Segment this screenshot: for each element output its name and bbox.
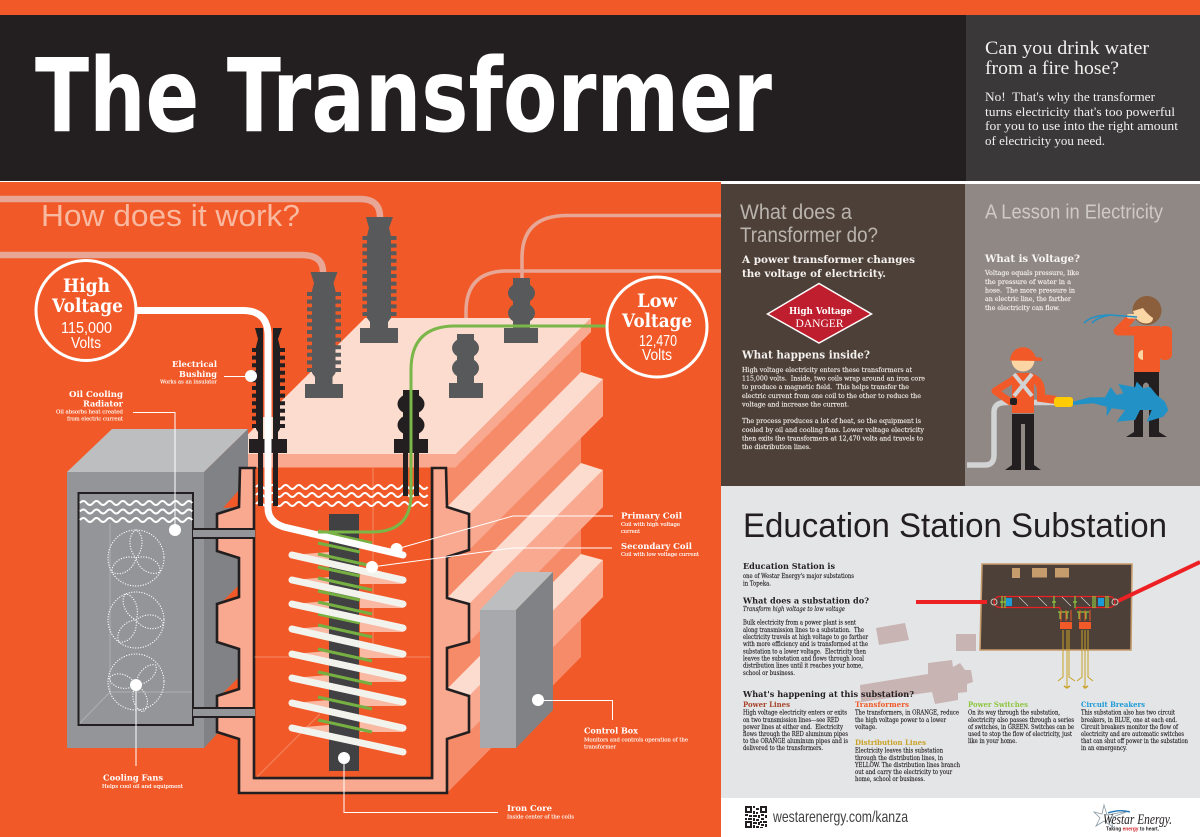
- iron core: [329, 514, 359, 771]
- green switches: [1000, 596, 1108, 619]
- text block: education station intro: Education Station is: [743, 562, 835, 572]
- text block: education station intro: Bulk electricity from a power plant is sent: [743, 620, 856, 626]
- yellow distribution lines: [1058, 630, 1093, 688]
- column: transformers: The transformers, in ORANGE, reduce: [855, 710, 959, 716]
- column: power lines: power lines at either end. Electricity: [743, 724, 843, 731]
- intro text: for you to use into the right amount: [985, 118, 1178, 133]
- panel: education station substation: [721, 486, 1200, 798]
- label: oil cooling radiator: Oil Cooling: [69, 390, 123, 400]
- footer: [745, 805, 1172, 832]
- text: website url: westarenergy.com/kanza: [772, 809, 908, 826]
- blue circuit breakers: [1006, 598, 1104, 606]
- column: power lines: to the ORANGE aluminum pipes and is: [743, 738, 848, 745]
- column: distribution lines: through the distribution lines, in: [855, 755, 943, 762]
- header band: [0, 15, 1200, 181]
- intro text: of electricity you need.: [985, 133, 1105, 148]
- label: electrical bushing: Bushing: [179, 370, 217, 380]
- label: iron core: Inside center of the coils: [507, 814, 574, 820]
- bushing: black cutaway low: [394, 390, 428, 496]
- label: control box: [532, 694, 688, 750]
- logo: westar energy: Taking energy to heart.: [1106, 826, 1159, 832]
- heading: what does a transformer do: What does a: [740, 201, 852, 224]
- icon: danger diamond: DANGER: [796, 316, 844, 330]
- substation ghost shapes: [860, 623, 976, 704]
- column: power lines: High voltage electricity enters or exits: [743, 710, 847, 716]
- oil cooling radiator box: [67, 429, 248, 748]
- panel: what does a transformer do: [721, 184, 965, 486]
- column: circuit breakers: Circuit Breakers: [1081, 700, 1145, 709]
- transformer tank side and cooling fins: [447, 342, 603, 793]
- heading: what does a transformer do: Transformer do?: [740, 224, 878, 247]
- column: distribution lines: [854, 738, 960, 783]
- label: primary coil: Primary Coil: [621, 512, 683, 522]
- low voltage green wire: [318, 326, 606, 532]
- transformer lid: [228, 318, 591, 468]
- control box: [480, 572, 553, 748]
- label: secondary coil: [366, 542, 700, 573]
- column: power lines: on two transmission lines—see RED: [743, 717, 839, 724]
- label: cooling fans: [102, 679, 184, 790]
- orange transformers: [1060, 610, 1091, 629]
- subheading: voltage change: the voltage of electricity.: [742, 268, 886, 280]
- text block: voltage explanation: the electricity can flow.: [985, 304, 1060, 312]
- text block: education station intro: Transform high voltage to low voltage: [743, 606, 845, 613]
- text block: inside explanation: 115,000 volts. Inside, two coils wrap around an iron core: [742, 374, 925, 382]
- intro text: from a fire hose?: [985, 58, 1119, 79]
- subheading: voltage change: [741, 254, 915, 280]
- text block: voltage explanation: Voltage equals pressure, like: [984, 269, 1079, 277]
- callout: low voltage: Voltage: [621, 310, 692, 332]
- bushing: second grey high-voltage: [305, 272, 343, 398]
- text block: education station intro: one of Westar Energy's major substations: [743, 573, 854, 580]
- column: transformers: voltage.: [854, 724, 877, 731]
- column: circuit breakers: [1081, 700, 1188, 752]
- text block: inside explanation: electric current from one coil to the other to reduce the: [742, 392, 921, 400]
- subheading: what is voltage: What is Voltage?: [984, 253, 1080, 265]
- callout: low voltage: [607, 277, 707, 377]
- red power lines: [916, 562, 1200, 610]
- callout: high voltage: [36, 260, 136, 360]
- high voltage white wire: [136, 310, 403, 555]
- callout: high voltage: Volts: [71, 335, 101, 352]
- logo: westar energy: [1094, 805, 1172, 832]
- column: power switches: like in your home.: [968, 738, 1017, 745]
- heading: how does it work: How does it work?: [41, 198, 300, 233]
- label: electrical bushing: Electrical: [172, 360, 218, 370]
- label: control box: Monitors and controls operation of the: [584, 738, 688, 744]
- column: circuit breakers: breakers, in BLUE, one at each end.: [1081, 717, 1177, 724]
- icon: danger diamond: [768, 284, 872, 343]
- text block: education station intro: along transmission lines to a substation. The: [743, 627, 864, 634]
- column: power lines: flows through the RED aluminum pipes: [743, 731, 848, 738]
- radiator connector pipes: [193, 529, 255, 717]
- text block: education station intro: substation to a lower voltage. Electricity then: [743, 648, 866, 656]
- text block: education station intro: What's happening at this substation?: [742, 690, 914, 700]
- intro text: No! That's why the transformer: [985, 89, 1156, 104]
- icon: danger diamond: High Voltage: [789, 307, 852, 317]
- heading: what does a transformer do: [740, 201, 878, 247]
- text block: inside explanation: High voltage electricity enters these transformers at: [742, 366, 912, 374]
- label: iron core: Iron Core: [507, 804, 553, 814]
- intro text: [985, 38, 1178, 148]
- text block: education station intro: [742, 562, 914, 700]
- label: secondary coil: Coil with low voltage current: [621, 552, 700, 558]
- subheading: voltage change: A power transformer changes: [741, 254, 915, 266]
- column: distribution lines: Distribution Lines: [855, 738, 926, 747]
- column: circuit breakers: Circuit breakers monitor the flow of: [1081, 724, 1179, 731]
- logo: westar energy: Westar Energy.: [1103, 812, 1172, 828]
- intro text: Can you drink water: [985, 38, 1150, 59]
- label: primary coil: [390, 512, 683, 555]
- label: primary coil: Coil with high voltage: [621, 522, 680, 528]
- panel: how does it work: [0, 182, 721, 837]
- callout: low voltage: Volts: [642, 347, 672, 364]
- label: cooling fans: Helps cool oil and equipment: [102, 784, 184, 790]
- column: power switches: of switches, in GREEN. Switches can be: [968, 724, 1074, 731]
- column: distribution lines: YELLOW. The distribution lines branch: [854, 762, 960, 769]
- callout: high voltage: 115,000: [61, 320, 112, 337]
- tank oil waves: [256, 485, 428, 506]
- secondary coil green: [318, 531, 372, 732]
- bushing: low-voltage grey front: [449, 334, 483, 398]
- label: control box: transformer: [584, 744, 617, 750]
- bushing: low-voltage grey rear: [504, 278, 538, 343]
- label: cooling fans: Cooling Fans: [103, 774, 163, 784]
- bushing: tall high-voltage grey: [360, 217, 398, 343]
- column: circuit breakers: electricity and are automatic switches: [1081, 731, 1184, 738]
- column: transformers: Transformers: [855, 700, 909, 709]
- label: oil cooling radiator: Oil absorbs heat created: [56, 410, 124, 416]
- text block: education station intro: distribution lines until it reaches your home,: [743, 662, 863, 670]
- column: power lines: delivered to the transformers.: [743, 745, 823, 752]
- label: control box: Control Box: [584, 726, 639, 736]
- callout: high voltage: High: [63, 275, 110, 297]
- substation map: [916, 562, 1200, 688]
- title: The Transformer: [35, 37, 772, 155]
- text block: education station intro: with more efficiency and is transformed at the: [743, 641, 868, 648]
- column: circuit breakers: in an emergency.: [1081, 745, 1127, 752]
- subheading: what happens inside: What happens inside?: [741, 348, 870, 362]
- text block: voltage explanation: [984, 269, 1079, 312]
- text block: inside explanation: cooled by oil and cooling fans. Lower voltage electricity: [742, 426, 924, 434]
- callout: low voltage: 12,470: [639, 333, 677, 350]
- column: transformers: the high voltage power to a lower: [855, 717, 946, 724]
- radiator oil waves: [80, 501, 192, 522]
- text block: inside explanation: the distribution lines.: [742, 443, 811, 451]
- text block: education station intro: leaves the substation and flows through local: [743, 656, 864, 662]
- column: power lines: [743, 700, 848, 752]
- icon: man drinking from fire hose: [1084, 296, 1172, 437]
- icon: cooling fans: [103, 530, 173, 713]
- column: power switches: [968, 700, 1074, 745]
- text block: voltage explanation: the pressure of water in a: [985, 278, 1071, 286]
- label: oil cooling radiator: from electric current: [67, 416, 124, 422]
- intro text: turns electricity that's too powerful: [985, 104, 1175, 119]
- bushing: electrical bushing black cutaway high: [249, 328, 287, 506]
- label: iron core: [338, 752, 574, 820]
- text block: inside explanation: The process produces a lot of heat, so the equipment is: [742, 417, 921, 425]
- column: power switches: Power Switches: [968, 700, 1028, 709]
- column: distribution lines: out and carry the electricity to your: [855, 769, 952, 776]
- transformer tank cross-section: [193, 468, 469, 793]
- coil shading: [292, 552, 403, 738]
- text block: education station intro: in Topeka.: [743, 580, 771, 588]
- text block: inside explanation: then exits the transformers at 12,470 volts and travels to: [742, 434, 923, 442]
- column: distribution lines: Electricity leaves this substation: [855, 748, 943, 754]
- text block: inside explanation: [741, 366, 925, 451]
- icon: firefighter with hose: [967, 347, 1168, 470]
- incoming and outgoing power pipes: [0, 199, 721, 334]
- text block: education station intro: What does a substation do?: [742, 596, 869, 606]
- text block: voltage explanation: hose. The more pressure in: [985, 286, 1075, 294]
- text block: education station intro: electricity travels at high voltage to go farther: [743, 634, 868, 641]
- column: power lines: Power Lines: [743, 700, 790, 709]
- primary coil white: [292, 555, 403, 752]
- column: power switches: On its way through the substation,: [968, 710, 1060, 716]
- callout: low voltage: Low: [637, 290, 678, 312]
- panel: a lesson in electricity: [965, 184, 1200, 486]
- callout: high voltage: Voltage: [51, 295, 123, 317]
- label: oil cooling radiator: [56, 390, 181, 536]
- heading: education station substation: Education Station Substation: [743, 507, 1167, 545]
- text block: education station intro: school or business.: [743, 670, 795, 677]
- text block: voltage explanation: an electric line, the farther: [985, 295, 1072, 303]
- column: distribution lines: home, school or business.: [855, 776, 925, 783]
- column: power switches: used to stop the flow of electricity, just: [968, 731, 1072, 738]
- label: electrical bushing: [160, 360, 257, 386]
- text block: inside explanation: to produce a magnetic field. This helps transfer the: [742, 383, 909, 391]
- label: primary coil: current: [621, 529, 641, 535]
- heading: a lesson in electricity: A Lesson in Electricity: [985, 202, 1163, 224]
- label: oil cooling radiator: Radiator: [83, 400, 123, 410]
- label: secondary coil: Secondary Coil: [621, 542, 693, 552]
- column: power switches: electricity also passes through a series: [968, 717, 1074, 724]
- label: electrical bushing: Works as an insulator: [160, 380, 218, 386]
- text block: inside explanation: voltage and increase the current.: [741, 400, 849, 408]
- column: transformers: [854, 700, 959, 731]
- icon: QR code: [745, 806, 767, 828]
- column: circuit breakers: This substation also has two circuit: [1081, 710, 1175, 716]
